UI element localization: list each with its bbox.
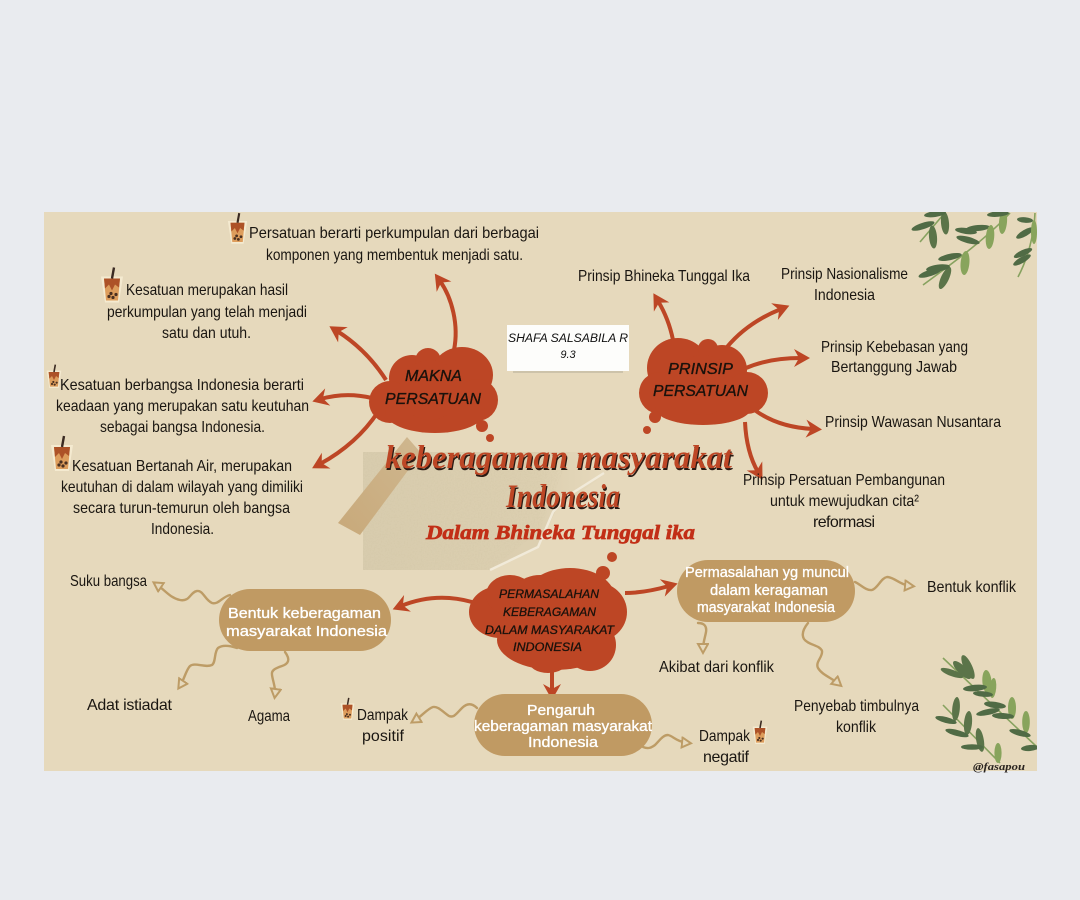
text: bentuk labels bbox=[70, 573, 290, 725]
label: permasalahan keberagaman: DALAM MASYARAKAT bbox=[485, 623, 616, 637]
text: kesatuan: Kesatuan merupakan hasil bbox=[126, 282, 288, 299]
pill: permasalahan yg muncul: Permasalahan yg muncul bbox=[685, 564, 849, 581]
text: bentuk labels: Agama bbox=[248, 708, 290, 725]
author box: 9.3 bbox=[560, 349, 577, 361]
label: permasalahan keberagaman: PERMASALAHAN bbox=[499, 587, 599, 601]
title: keberagaman masyarakat bbox=[385, 440, 733, 476]
cloud: makna persatuan bbox=[369, 347, 498, 442]
text: persatuan bbox=[249, 225, 539, 264]
label: prinsip persatuan bbox=[653, 361, 748, 400]
icon: boba cup dampak negatif bbox=[753, 721, 767, 744]
text: kesatuan bertanah air: Indonesia. bbox=[151, 521, 214, 538]
text: kesatuan bertanah air: secara turun-temurun oleh bangsa bbox=[73, 500, 290, 517]
text: bentuk labels: Adat istiadat bbox=[87, 697, 173, 714]
pill: pengaruh keberagaman: keberagaman masyarakat bbox=[474, 718, 653, 735]
text: kesatuan bertanah air: keutuhan di dalam wilayah yang dimiliki bbox=[61, 479, 303, 496]
text: prinsip list: Bertanggung Jawab bbox=[831, 359, 957, 376]
watermark: @fasapou bbox=[973, 761, 1025, 773]
pill: permasalahan yg muncul bbox=[677, 560, 855, 622]
text: kesatuan berbangsa: Kesatuan berbangsa Indonesia berarti bbox=[60, 377, 304, 394]
arrows: prinsip persatuan bbox=[658, 301, 813, 472]
label: permasalahan keberagaman: KEBERAGAMAN bbox=[503, 605, 596, 619]
subtitle: Dalam Bhineka Tunggal ika bbox=[425, 522, 695, 544]
text: kesatuan berbangsa bbox=[56, 377, 309, 436]
icon: leaves bottom right bbox=[935, 653, 1039, 763]
pill: pengaruh keberagaman: Indonesia bbox=[528, 734, 599, 751]
title bbox=[385, 440, 733, 515]
icon: boba cup berbangsa bbox=[47, 365, 61, 388]
text: prinsip list bbox=[578, 266, 1001, 531]
label: makna persatuan: PERSATUAN bbox=[385, 391, 481, 408]
text: kesatuan: satu dan utuh. bbox=[162, 325, 251, 342]
text: konflik labels: Penyebab timbulnya bbox=[794, 698, 919, 715]
text: prinsip list: Prinsip Wawasan Nusantara bbox=[825, 414, 1001, 431]
label: permasalahan keberagaman bbox=[485, 587, 616, 654]
thin wavy connector arrows bbox=[156, 577, 911, 748]
text: konflik labels: Bentuk konflik bbox=[927, 579, 1017, 596]
text: kesatuan: perkumpulan yang telah menjadi bbox=[107, 304, 307, 321]
text: kesatuan bertanah air bbox=[61, 458, 303, 538]
arrows: makna persatuan bbox=[320, 281, 456, 464]
pill: bentuk keberagaman: masyarakat Indonesia bbox=[226, 623, 388, 640]
label: prinsip persatuan: PERSATUAN bbox=[653, 383, 748, 400]
arrows: permasalahan keberagaman bbox=[401, 586, 669, 691]
text: dampak labels bbox=[357, 707, 751, 766]
cloud: permasalahan keberagaman bbox=[469, 552, 627, 673]
torn paper with tape bbox=[338, 437, 606, 570]
icon: boba cup top bbox=[228, 213, 247, 244]
text: kesatuan bertanah air: Kesatuan Bertanah Air, merupakan bbox=[72, 458, 292, 475]
text: prinsip list: Indonesia bbox=[814, 287, 875, 304]
author box: SHAFA SALSABILA R bbox=[508, 333, 628, 345]
label: makna persatuan bbox=[385, 368, 481, 408]
text: prinsip list: Prinsip Kebebasan yang bbox=[821, 339, 968, 356]
title: Indonesia bbox=[505, 479, 620, 515]
text: prinsip list: Prinsip Bhineka Tunggal Ika bbox=[578, 268, 750, 285]
text: kesatuan berbangsa: keadaan yang merupakan satu keutuhan bbox=[56, 398, 309, 415]
text: prinsip list: untuk mewujudkan cita² bbox=[770, 493, 920, 510]
icon: boba cup bertanah air bbox=[51, 436, 73, 471]
cloud: prinsip persatuan bbox=[639, 338, 768, 434]
text: konflik labels: konflik bbox=[836, 719, 877, 736]
background panel bbox=[44, 212, 1037, 771]
text: prinsip list: Prinsip Persatuan Pembangunan bbox=[743, 472, 945, 489]
pill: pengaruh keberagaman: Pengaruh bbox=[527, 702, 595, 719]
text: prinsip list: Prinsip Nasionalisme bbox=[781, 266, 908, 283]
pill: permasalahan yg muncul: masyarakat Indonesia bbox=[697, 599, 836, 616]
text: kesatuan berbangsa: sebagai bangsa Indonesia. bbox=[100, 419, 265, 436]
text: persatuan: Persatuan berarti perkumpulan dari berbagai bbox=[249, 225, 539, 242]
pill: bentuk keberagaman: Bentuk keberagaman bbox=[228, 605, 381, 622]
text: kesatuan bbox=[107, 282, 307, 342]
text: dampak labels: positif bbox=[362, 728, 405, 745]
text: konflik labels bbox=[659, 579, 1017, 736]
author box bbox=[507, 325, 629, 373]
pill: pengaruh keberagaman bbox=[474, 694, 653, 756]
icon: boba cup kesatuan bbox=[101, 268, 123, 302]
label: permasalahan keberagaman: INDONESIA bbox=[513, 640, 582, 654]
text: persatuan: komponen yang membentuk menjadi satu. bbox=[266, 247, 523, 264]
text: dampak labels: negatif bbox=[703, 749, 750, 766]
pill: permasalahan yg muncul: dalam keragaman bbox=[710, 582, 828, 599]
text: bentuk labels: Suku bangsa bbox=[70, 573, 147, 590]
text: prinsip list: reformasi bbox=[813, 514, 875, 531]
text: dampak labels: Dampak bbox=[357, 707, 409, 724]
icon: boba cup dampak positif bbox=[341, 698, 354, 720]
text: konflik labels: Akibat dari konflik bbox=[659, 659, 775, 676]
text: dampak labels: Dampak bbox=[699, 728, 751, 745]
label: prinsip persatuan: PRINSIP bbox=[668, 361, 733, 378]
icon: leaves top right bbox=[911, 209, 1037, 291]
pill: bentuk keberagaman bbox=[219, 589, 391, 651]
label: makna persatuan: MAKNA bbox=[405, 368, 462, 385]
